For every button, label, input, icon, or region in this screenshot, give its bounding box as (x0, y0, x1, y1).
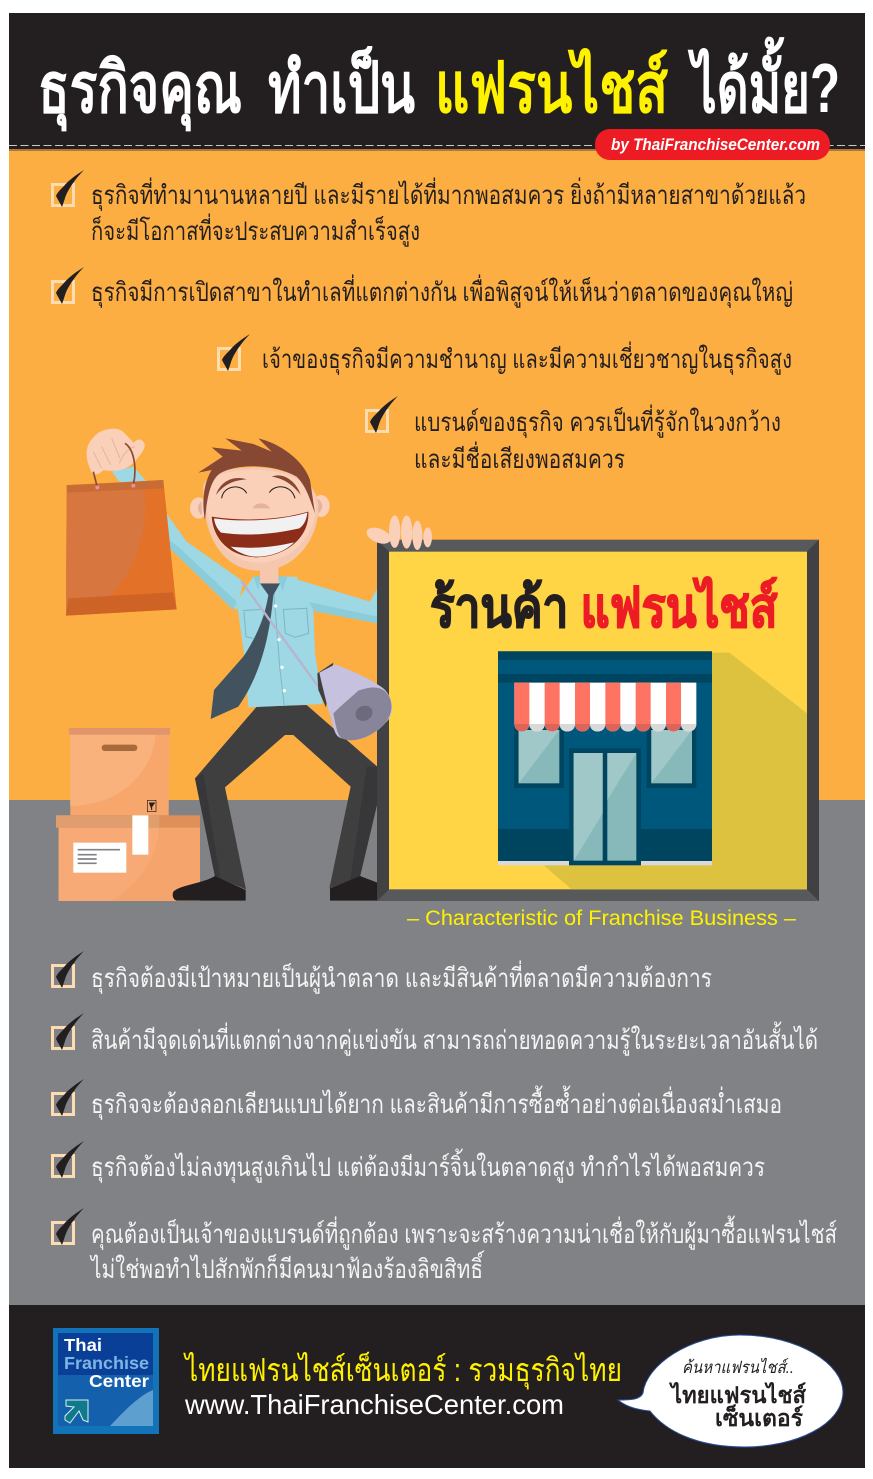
door (569, 748, 641, 865)
title: ธุรกิจคุณ (38, 49, 242, 132)
bullet 4: แบรนด์ของธุรกิจ ควรเป็นที่รู้จักในวงกว้าง (414, 404, 781, 438)
awning (514, 683, 696, 731)
illustration: businessman (66, 429, 377, 901)
badge: by ThaiFranchiseCenter.com: by ThaiFranchiseCenter.com (611, 135, 820, 154)
shoes (173, 876, 246, 901)
bullet 1 (52, 170, 806, 247)
windows (514, 727, 564, 788)
bullet 1: ก็จะมีโอกาสที่จะประสบความสำเร็จสูง (91, 213, 420, 247)
title (38, 36, 840, 132)
logo: Thai Franchise Center: Thai (64, 1335, 102, 1355)
caption: – Characteristic of Franchise Business – (407, 906, 796, 930)
speech bubble: ค้นหาแฟรนไชส์.. (682, 1357, 794, 1377)
strap (241, 581, 318, 687)
bullet 8 (52, 1141, 765, 1183)
store sign (377, 540, 819, 901)
title: แฟรนไชส์ (435, 47, 668, 127)
bullet 5 (52, 951, 712, 994)
shirt (237, 577, 323, 707)
bullet 9: ไม่ใช่พอทำไปสักพักก็มีคนมาฟ้องร้องลิขสิทธิ์ (89, 1250, 485, 1284)
neck (260, 567, 278, 583)
eyebrows and eyes (216, 475, 301, 495)
sign frame (377, 540, 819, 901)
hair (198, 438, 315, 520)
bullet 7 (52, 1079, 782, 1120)
bullet 6 (52, 1013, 818, 1056)
panel: header band (9, 13, 865, 151)
hand with fist (87, 429, 145, 474)
left hand on sign (364, 515, 432, 550)
bullet 9 (52, 1208, 837, 1284)
sign heading (430, 576, 778, 639)
footer heading: ไทยแฟรนไชส์เซ็นเตอร์ : รวมธุรกิจไทย (183, 1351, 622, 1390)
bullet 4: และมีชื่อเสียงพอสมควร (414, 441, 625, 474)
logo: Thai Franchise Center (53, 1328, 159, 1434)
mouth (212, 512, 308, 557)
megaphone (317, 663, 392, 740)
sign heading: แฟรนไชส์ (581, 576, 778, 639)
logo: Thai Franchise Center: Franchise (64, 1353, 149, 1373)
shopping bag arm (112, 467, 243, 610)
bullet 2 (52, 267, 793, 308)
bag (66, 480, 177, 616)
speech bubble: เซ็นเตอร์ (715, 1403, 804, 1431)
shop icon (498, 651, 712, 865)
sign heading: ร้านค้า (430, 577, 568, 639)
speech bubble: ไทยแฟรนไชส์ (668, 1381, 807, 1408)
right arm (297, 579, 377, 623)
bullet 4 (366, 396, 781, 474)
speech bubble (618, 1335, 843, 1447)
long shadow (543, 653, 807, 889)
bullet 5: ธุรกิจต้องมีเป้าหมายเป็นผู้นำตลาด และมีสินค้าที่ตลาดมีความต้องการ (91, 960, 712, 994)
panel: footer band (9, 1305, 865, 1468)
footer url: www.ThaiFranchiseCenter.com (184, 1389, 564, 1420)
trousers (195, 705, 377, 889)
tie (211, 583, 280, 719)
bullet 3 (218, 334, 792, 375)
nose (253, 503, 270, 508)
title: ทำเป็น (268, 45, 415, 127)
badge: by ThaiFranchiseCenter.com (595, 129, 830, 160)
logo: Thai Franchise Center: Center (89, 1371, 149, 1391)
ears (190, 497, 207, 519)
face (203, 467, 318, 571)
illustration: cardboard boxes (56, 728, 200, 901)
